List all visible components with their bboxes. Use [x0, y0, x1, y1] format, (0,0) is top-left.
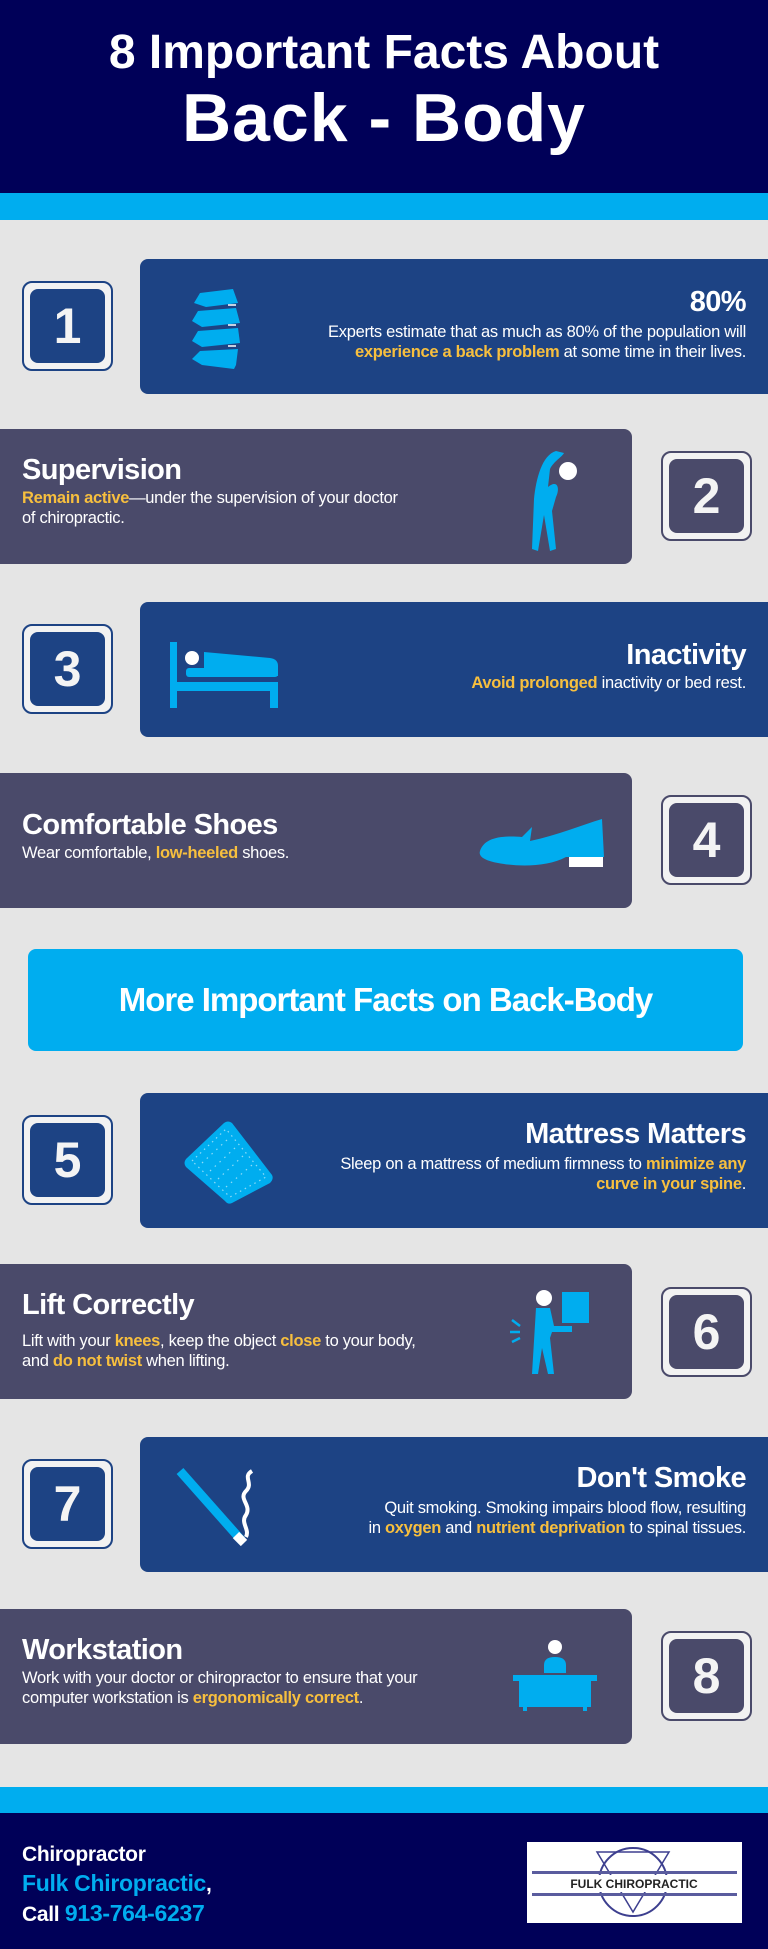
icon: shoe [480, 819, 604, 867]
header [0, 0, 768, 193]
number box 6 [661, 1287, 752, 1377]
card 1 [140, 259, 768, 394]
number box 1: 1 [54, 298, 81, 354]
card 6 [0, 1264, 632, 1399]
title: Supervision [22, 454, 181, 486]
contact text [22, 1843, 212, 1926]
number box 6: 6 [693, 1304, 720, 1360]
number box 2 [661, 451, 752, 541]
body text [22, 1332, 416, 1370]
title: Back - Body [182, 80, 586, 156]
number box 8: 8 [693, 1648, 720, 1704]
number box 5 [22, 1115, 113, 1205]
title: Don't Smoke [577, 1462, 746, 1494]
title: Lift Correctly [22, 1289, 194, 1321]
body text: computer workstation is ergonomically correct. [22, 1689, 363, 1707]
card 5 [140, 1093, 768, 1228]
icon: spine [192, 289, 240, 369]
body text [22, 1669, 418, 1707]
body text [368, 1499, 746, 1537]
number box 7 [22, 1459, 113, 1549]
icon: lifting person [510, 1290, 589, 1374]
icon: bed [170, 642, 278, 708]
number box 2: 2 [693, 468, 720, 524]
body text: Remain active—under the supervision of your doctor [22, 489, 398, 507]
number box 1 [22, 281, 113, 371]
title: 80%: 80% [690, 286, 746, 318]
contact text: Chiropractor [22, 1843, 146, 1866]
body text [328, 323, 746, 361]
body text: Quit smoking. Smoking impairs blood flow, resulting [384, 1499, 746, 1517]
body text: experience a back problem at some time in their lives. [355, 343, 746, 361]
body text: of chiropractic. [22, 509, 124, 527]
logo [527, 1842, 742, 1923]
number box 4 [661, 795, 752, 885]
card 3 [140, 602, 768, 737]
body text: Lift with your knees, keep the object close to your body, [22, 1332, 416, 1350]
cyan band top [0, 193, 768, 220]
title: Mattress Matters [525, 1118, 746, 1150]
title [109, 26, 659, 156]
body text: in oxygen and nutrient deprivation to spinal tissues. [368, 1519, 746, 1537]
card 7 [140, 1437, 768, 1572]
body text: curve in your spine. [596, 1175, 746, 1193]
card 2 [0, 429, 632, 564]
icon: cigarette [176, 1468, 253, 1546]
footer [0, 1813, 768, 1949]
title: Inactivity [626, 639, 746, 671]
body text: Sleep on a mattress of medium firmness to minimize any [340, 1155, 746, 1173]
icon: stretching person [532, 451, 577, 551]
body text: Experts estimate that as much as 80% of the population will [328, 323, 746, 341]
number box 5: 5 [54, 1132, 81, 1188]
number box 3 [22, 624, 113, 714]
icon: desk [513, 1640, 597, 1711]
banner: More Important Facts on Back-Body [119, 981, 652, 1018]
card 4 [0, 773, 632, 908]
body text [22, 489, 398, 527]
body text [340, 1155, 746, 1193]
number box 8 [661, 1631, 752, 1721]
logo: FULK CHIROPRACTIC [570, 1877, 698, 1891]
body text: Avoid prolonged inactivity or bed rest. [471, 674, 746, 692]
body text: Wear comfortable, low-heeled shoes. [22, 844, 289, 862]
card 8 [0, 1609, 632, 1744]
body text: and do not twist when lifting. [22, 1352, 229, 1370]
title: Workstation [22, 1634, 182, 1666]
number box 4: 4 [693, 812, 720, 868]
banner [28, 949, 743, 1051]
title: Comfortable Shoes [22, 809, 278, 841]
body text: Work with your doctor or chiropractor to ensure that your [22, 1669, 417, 1687]
contact text: Fulk Chiropractic, [22, 1870, 212, 1896]
cyan band bottom [0, 1787, 768, 1813]
contact text: Call 913-764-6237 [22, 1900, 204, 1926]
number box 7: 7 [54, 1476, 81, 1532]
title: 8 Important Facts About [109, 26, 659, 79]
number box 3: 3 [54, 641, 81, 697]
icon: mattress [184, 1122, 273, 1204]
